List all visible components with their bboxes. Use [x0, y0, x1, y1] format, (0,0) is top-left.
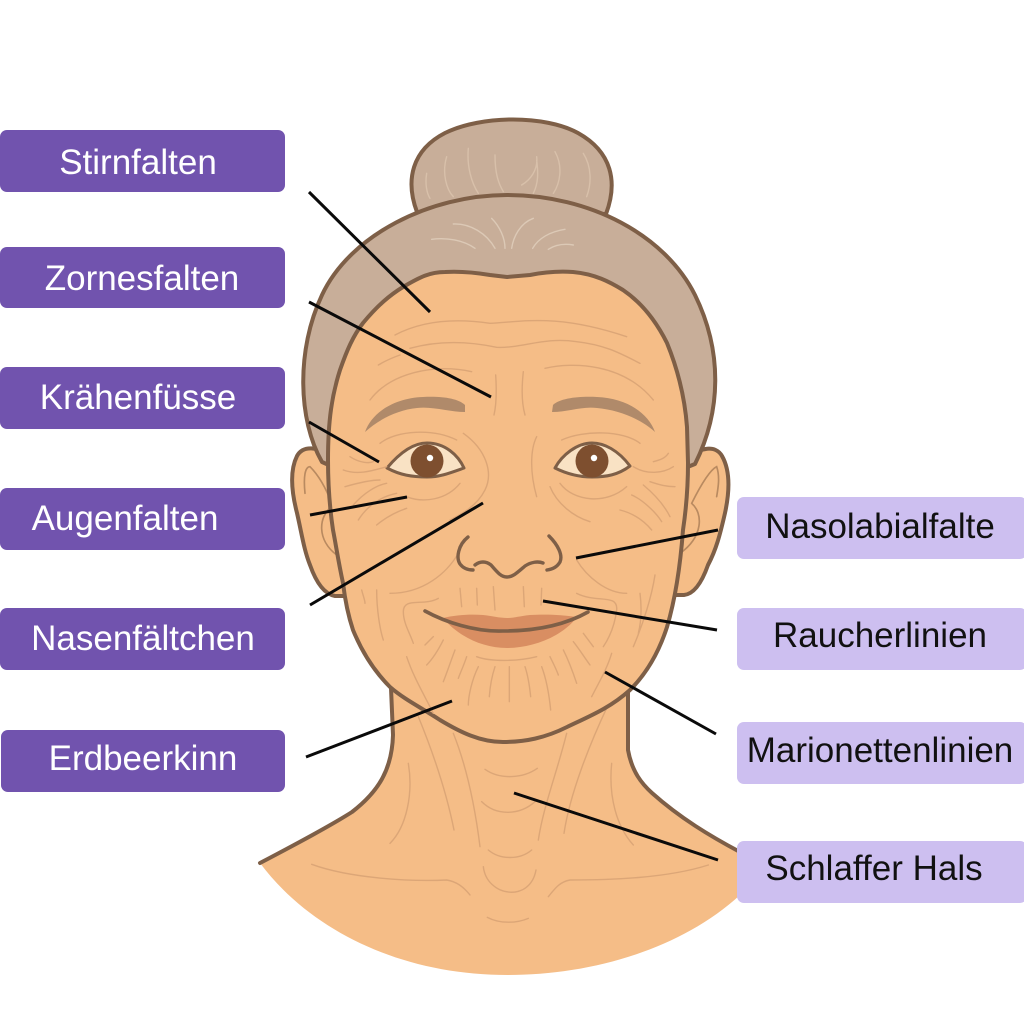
face shape — [328, 272, 688, 742]
label: Stirnfalten: Stirnfalten — [59, 143, 217, 182]
eyebrow left — [365, 397, 465, 432]
label: Nasolabialfalte: Nasolabialfalte — [765, 507, 995, 546]
left ear — [292, 448, 350, 596]
label: Erdbeerkinn — [1, 730, 285, 792]
eye left — [387, 443, 464, 478]
label: Zornesfalten — [0, 247, 285, 308]
neck wrinkles — [312, 707, 708, 922]
forehead wrinkles — [370, 321, 653, 443]
neck and shoulders — [260, 680, 740, 975]
label: Krähenfüsse — [0, 367, 285, 429]
hair bun — [412, 120, 612, 214]
label: Marionettenlinien — [737, 722, 1024, 784]
label: Nasenfältchen — [0, 608, 285, 670]
label: Augenfalten — [0, 488, 285, 550]
label: Krähenfüsse: Krähenfüsse — [40, 378, 236, 417]
right ear — [670, 449, 728, 595]
label: Marionettenlinien: Marionettenlinien — [747, 731, 1013, 770]
label: Raucherlinien — [737, 608, 1024, 670]
label: Nasenfältchen: Nasenfältchen — [31, 619, 255, 658]
label: Schlaffer Hals: Schlaffer Hals — [765, 849, 983, 888]
label: Zornesfalten: Zornesfalten — [45, 259, 239, 298]
eyebrow right — [552, 397, 655, 432]
mouth — [425, 611, 588, 648]
pointer lines — [306, 192, 718, 860]
label: Schlaffer Hals — [737, 841, 1024, 903]
eye and cheek wrinkles — [343, 433, 675, 713]
label: Erdbeerkinn: Erdbeerkinn — [49, 739, 237, 778]
illustration: elderly woman's face — [260, 120, 740, 975]
label: Augenfalten: Augenfalten — [32, 499, 218, 538]
label: Nasolabialfalte — [737, 497, 1024, 559]
label: Raucherlinien: Raucherlinien — [773, 616, 987, 655]
nose — [458, 536, 561, 577]
hair — [303, 195, 715, 470]
label: Stirnfalten — [0, 130, 285, 192]
eye right — [555, 443, 630, 478]
